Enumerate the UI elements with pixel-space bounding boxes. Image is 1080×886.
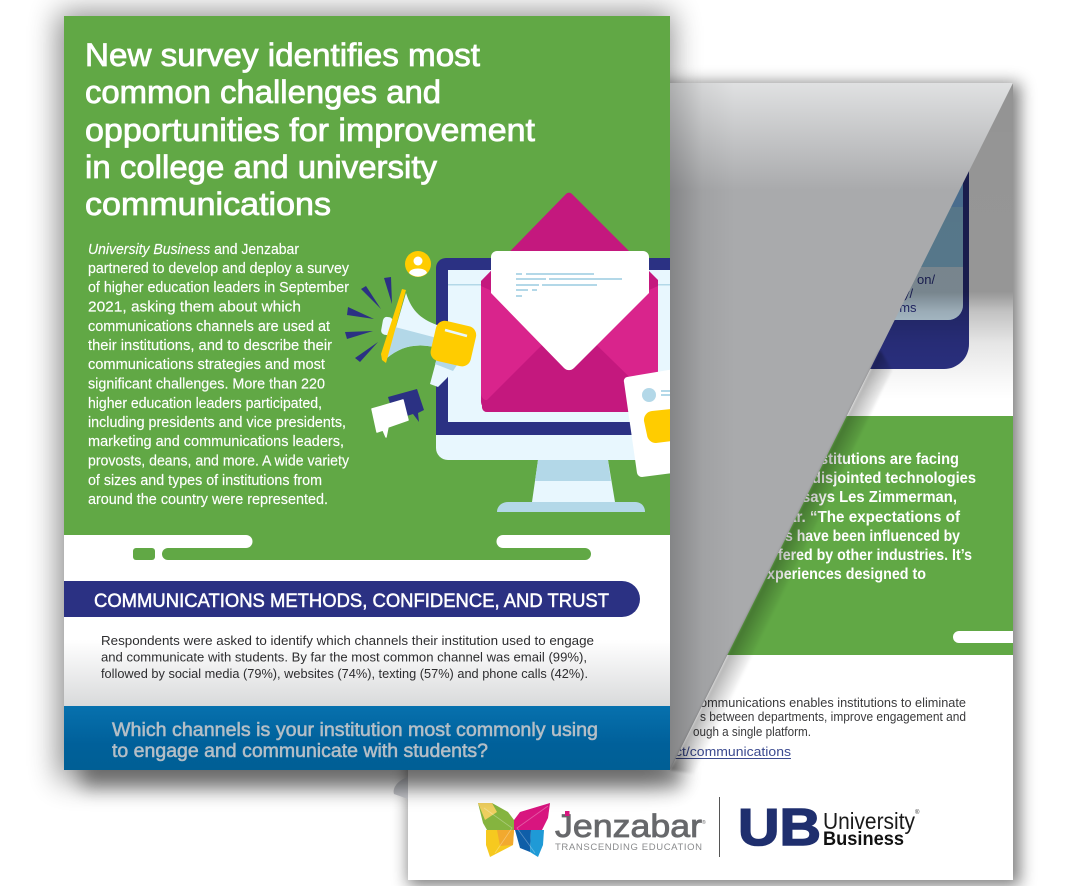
logo: University Business: Business bbox=[823, 828, 904, 850]
intro text block: including presidents and vice presidents, bbox=[88, 415, 346, 431]
navy chart card behind fold bbox=[870, 171, 969, 369]
intro text block bbox=[88, 242, 350, 508]
title: New survey identifies most bbox=[85, 37, 480, 73]
icon: speech bubbles bbox=[372, 389, 424, 437]
monitor frame bbox=[436, 258, 680, 460]
question banner: to engage and communicate with students? bbox=[112, 740, 488, 762]
panel: back page bbox=[408, 83, 1043, 880]
intro text block: partnered to develop and deploy a survey bbox=[88, 261, 350, 277]
small profile card bbox=[624, 370, 670, 477]
icon: megaphone bbox=[381, 289, 478, 387]
section paragraph: Respondents were asked to identify which channels their institution used to engage bbox=[101, 633, 594, 648]
intro text block: of sizes and types of institutions from bbox=[88, 473, 322, 489]
white tab left bbox=[240, 535, 252, 548]
quote text: ar. “The expectations of bbox=[788, 509, 961, 526]
quote text: fered by other industries. It’s bbox=[778, 547, 972, 564]
intro text block: provosts, deans, and more. A wide variety bbox=[88, 454, 350, 470]
green wave decoration bbox=[133, 535, 591, 560]
quote text: disjointed technologies bbox=[812, 470, 976, 487]
shadow: back page bbox=[408, 83, 1020, 886]
logo: Jenzabar wordmark: ® bbox=[702, 819, 706, 826]
logo: Jenzabar wordmark: Jenzabar bbox=[555, 808, 702, 844]
intro text block: higher education leaders participated, bbox=[88, 396, 322, 412]
section paragraph: followed by social media (79%), websites (74%), texting (57%) and phone calls (42%). bbox=[101, 666, 588, 681]
intro text block: significant challenges. More than 220 bbox=[88, 376, 325, 392]
section heading bar: COMMUNICATIONS METHODS, CONFIDENCE, AND TRUST bbox=[94, 590, 609, 612]
intro text block: around the country were represented. bbox=[88, 492, 328, 508]
quote text: stitutions are facing bbox=[820, 451, 959, 468]
intro text block: communications strategies and most bbox=[88, 357, 325, 373]
back page paragraph: ommunications enables institutions to eliminate bbox=[700, 696, 966, 710]
section heading bar bbox=[64, 581, 640, 617]
quote text: s have been influenced by bbox=[785, 528, 960, 545]
back page paragraph: ough a single platform. bbox=[693, 725, 811, 739]
white tab right bbox=[496, 535, 510, 548]
question banner: Which channels is your institution most commonly using bbox=[112, 719, 598, 741]
letter bbox=[491, 251, 649, 370]
quote text: xperiences designed to bbox=[767, 566, 926, 583]
intro text block: 2021, asking them about which bbox=[88, 300, 301, 316]
logo: University Business: ® bbox=[915, 809, 920, 816]
logo divider bbox=[719, 797, 720, 857]
title: communications bbox=[85, 186, 331, 222]
logo: Jenzabar wordmark: TRANSCENDING EDUCATION bbox=[555, 842, 702, 853]
shadow: front page bbox=[58, 12, 672, 780]
intro text block: University Business and Jenzabar bbox=[88, 242, 299, 258]
title bbox=[85, 37, 535, 222]
panel: green header bbox=[64, 16, 670, 560]
back page paragraph bbox=[675, 696, 966, 759]
icon: person badge bbox=[405, 251, 431, 277]
quote text bbox=[767, 451, 976, 583]
fade on lower page bbox=[64, 654, 670, 706]
intro text block: marketing and communications leaders, bbox=[88, 434, 344, 450]
logo: Jenzabar wordmark bbox=[555, 808, 706, 853]
back page paragraph: ct/communications bbox=[675, 745, 791, 759]
title: opportunities for improvement bbox=[85, 112, 535, 148]
logo: University Business: UB bbox=[738, 799, 821, 857]
fold shadow bbox=[670, 350, 892, 774]
shadow: front page bottom bbox=[82, 758, 682, 788]
card label fragments: on/ bbox=[917, 272, 935, 287]
card label fragments: y/ bbox=[903, 286, 914, 301]
card label fragments: ems bbox=[892, 300, 917, 315]
logos bbox=[478, 797, 920, 857]
envelope bbox=[481, 193, 658, 412]
monitor stand bbox=[497, 460, 645, 512]
panel: front page bbox=[64, 16, 680, 770]
card label fragments bbox=[900, 274, 936, 312]
question banner bbox=[64, 706, 670, 770]
small page curl bbox=[394, 777, 408, 799]
logo: Jenzabar butterfly bbox=[478, 803, 550, 857]
quote text: says Les Zimmerman, bbox=[802, 489, 957, 506]
section paragraph bbox=[101, 633, 594, 681]
illustration: monitor with envelope bbox=[436, 193, 680, 512]
back page paragraph: s between departments, improve engagement and bbox=[700, 710, 966, 724]
title: in college and university bbox=[85, 149, 437, 185]
panel: green quote bbox=[728, 416, 1013, 655]
intro text block: their institutions, and to describe their bbox=[88, 338, 332, 354]
title: common challenges and bbox=[85, 74, 441, 110]
intro text block: of higher education leaders in September bbox=[88, 280, 349, 296]
section paragraph: and communicate with students. By far the most common channel was email (99%), bbox=[101, 650, 587, 664]
pill decoration bbox=[953, 631, 1013, 643]
panel: folded page bbox=[670, 83, 1013, 774]
intro text block: communications channels are used at bbox=[88, 319, 330, 335]
top gray shading on back page bbox=[868, 83, 1013, 378]
icon: megaphone rays bbox=[345, 277, 392, 362]
logo: University Business bbox=[738, 799, 920, 857]
logo: University Business: University bbox=[823, 808, 915, 834]
